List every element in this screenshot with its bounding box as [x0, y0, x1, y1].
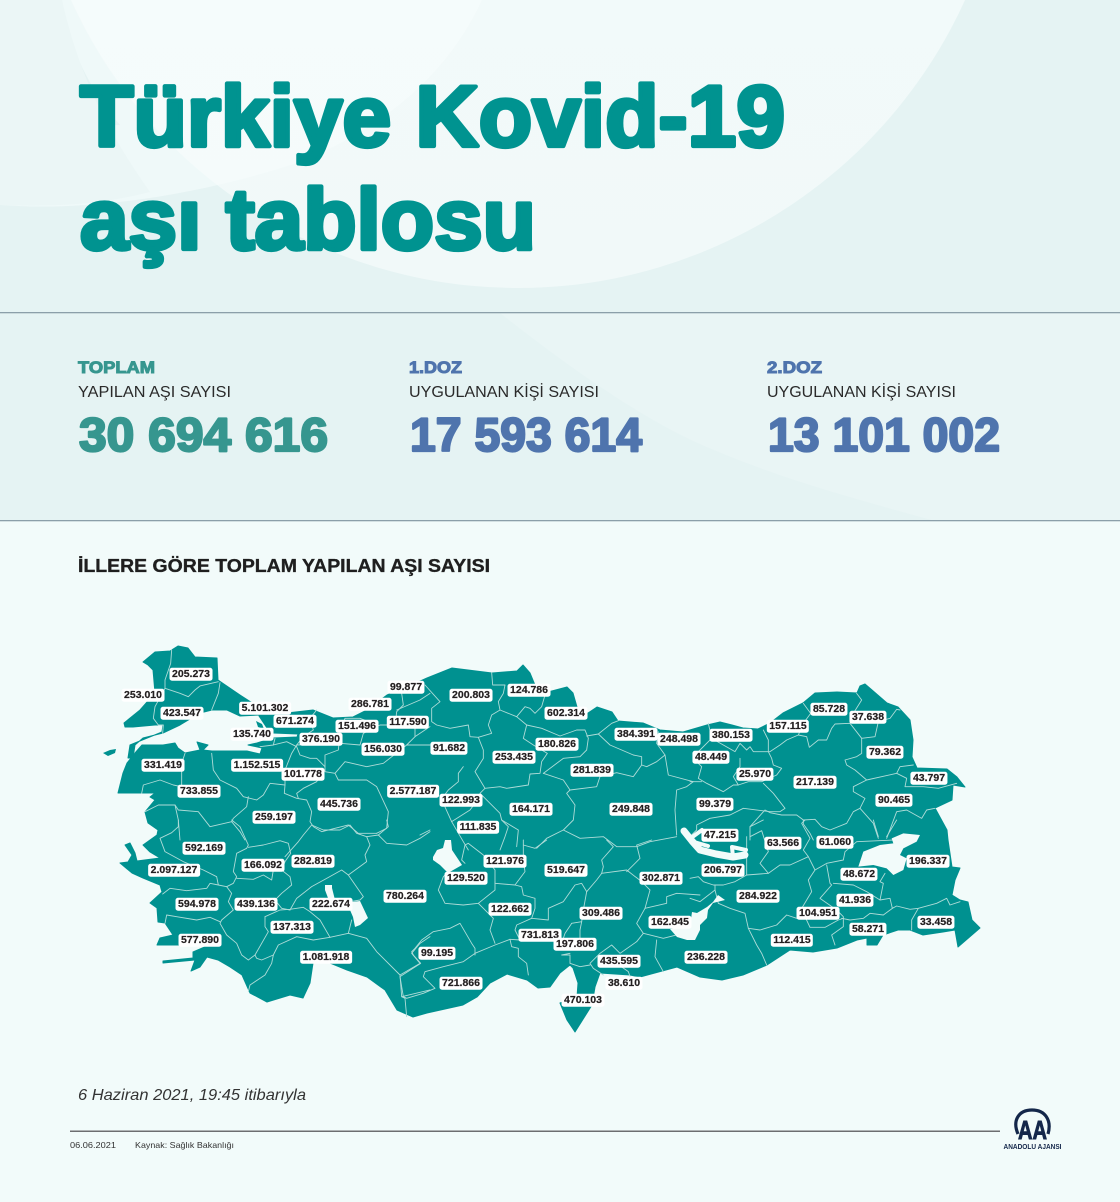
label: Sakarya: 376.190 [302, 733, 340, 745]
lake: Beyşehir [350, 901, 368, 927]
label: Bartın: 99.877 [390, 681, 422, 693]
footer rule [70, 1130, 1000, 1132]
lake: Atatürk dam [670, 895, 725, 940]
label: Aksaray: 129.520 [447, 872, 485, 884]
label: Gümüşhane: 48.449 [695, 751, 727, 763]
label: Düzce: 151.496 [338, 720, 376, 732]
label: Yalova: 135.740 [233, 728, 271, 740]
label: Isparta: 222.674 [312, 898, 350, 910]
land: Anatolia [118, 665, 980, 1032]
label: Siirt: 41.936 [839, 894, 871, 906]
label: Çankırı: 91.682 [433, 742, 465, 754]
label: Adana: 731.813 [521, 929, 559, 941]
logo: Anadolu Ajansı: ANADOLU AJANSI [1004, 1142, 1062, 1151]
footer source: Kaynak: Sağlık Bakanlığı [135, 1140, 234, 1150]
label: Balıkesir: 733.855 [180, 785, 218, 797]
province borders: south east [690, 820, 960, 965]
label: Artvin: 85.728 [813, 703, 845, 715]
label: İstanbul: 5.101.302 [242, 702, 288, 714]
label: Malatya: 302.871 [642, 872, 680, 884]
label: Kırklareli: 205.273 [172, 668, 210, 680]
label: Edirne: 253.010 [124, 689, 162, 701]
stat: 1. doz: UYGULANAN KİŞİ SAYISI [409, 382, 599, 401]
label: Manisa: 592.169 [185, 842, 223, 854]
label: Burdur: 137.313 [273, 921, 311, 933]
label: Erzurum: 217.139 [796, 776, 834, 788]
stat: 2. doz [767, 358, 1000, 461]
label: Ankara: 2.577.187 [390, 785, 436, 797]
panel: header background [0, 0, 1120, 520]
stat: toplam: 30 694 616 [79, 408, 328, 461]
province borders: northwest [142, 650, 430, 840]
label: İzmir: 2.097.127 [151, 864, 197, 876]
label: Antalya: 1.081.918 [303, 951, 349, 963]
lake: Van [858, 833, 920, 875]
stat: toplam: TOPLAM [78, 358, 155, 377]
label: Kocaeli: 671.274 [276, 715, 314, 727]
date note: 6 Haziran 2021, 19:45 itibarıyla [78, 1087, 306, 1104]
stat: 2. doz: 2.DOZ [767, 358, 822, 377]
divider line [0, 520, 1120, 521]
label: Bilecik: 101.778 [284, 768, 322, 780]
label: Amasya: 180.826 [538, 738, 576, 750]
divider line [0, 312, 1120, 313]
map: Turkey provinces [103, 646, 980, 1032]
label: Gaziantep: 435.595 [600, 955, 638, 967]
province borders: south centre [400, 840, 700, 998]
label: Samsun: 602.314 [547, 707, 585, 719]
title: aşı tablosu [80, 172, 536, 268]
label: Sivas: 249.848 [612, 803, 650, 815]
label: Kahramanmaraş: 309.486 [582, 907, 620, 919]
stat: 1. doz [409, 358, 642, 461]
label: Kırşehir: 111.835 [460, 821, 496, 833]
label: Kırıkkale: 122.993 [442, 794, 480, 806]
label: Eskişehir: 445.736 [320, 798, 358, 810]
label: Giresun: 248.498 [660, 733, 698, 745]
label: Bayburt: 25.970 [739, 768, 771, 780]
label: Ardahan: 37.638 [852, 711, 884, 723]
map heading: İLLERE GÖRE TOPLAM YAPILAN AŞI SAYISI [78, 556, 490, 576]
title [80, 69, 785, 268]
label: Rize: 157.115 [769, 720, 807, 732]
label: Adıyaman: 162.845 [651, 916, 689, 928]
stat: 1. doz: 1.DOZ [409, 358, 462, 377]
label: Niğde: 122.662 [491, 903, 529, 915]
island: Marmara [256, 721, 264, 729]
label: Denizli: 439.136 [237, 898, 275, 910]
label: Erzincan: 99.379 [699, 798, 731, 810]
label: Nevşehir: 121.976 [486, 855, 524, 867]
title: Türkiye Kovid-19 [80, 69, 785, 165]
label: Ağrı: 90.465 [878, 794, 910, 806]
label: Kayseri: 519.647 [547, 864, 585, 876]
label: Elazığ: 206.797 [704, 864, 742, 876]
label: Bitlis: 48.672 [843, 868, 875, 880]
label: Muğla: 577.890 [181, 934, 219, 946]
label: Kastamonu: 200.803 [452, 689, 490, 701]
lake: Eğirdir [325, 885, 335, 900]
stat: 1. doz: 17 593 614 [410, 408, 642, 461]
label: Bingöl: 63.566 [767, 837, 799, 849]
label: Çorum: 253.435 [495, 751, 533, 763]
label: Tunceli: 47.215 [704, 829, 736, 841]
lake: Tuz [433, 840, 462, 873]
label: Afyonkarahisar: 282.819 [294, 855, 332, 867]
footer date: 06.06.2021 [70, 1140, 116, 1150]
province borders: southwest [160, 820, 430, 1017]
label: Batman: 104.951 [799, 907, 837, 919]
label: Muş: 61.060 [819, 836, 851, 848]
label: Sinop: 124.786 [510, 684, 548, 696]
stat: 2. doz: 13 101 002 [768, 408, 1000, 461]
label: Iğdır: 43.797 [913, 772, 945, 784]
label: Şanlıurfa: 236.228 [687, 951, 725, 963]
stat: 2. doz: UYGULANAN KİŞİ SAYISI [767, 382, 956, 401]
label: Diyarbakır: 284.922 [739, 890, 777, 902]
label: Ordu: 384.391 [617, 728, 655, 740]
label: Tokat: 281.839 [573, 764, 611, 776]
label: Uşak: 166.092 [244, 859, 282, 871]
label: Van: 196.337 [909, 855, 947, 867]
label: Kütahya: 259.197 [255, 811, 293, 823]
label: Kars: 79.362 [869, 746, 901, 758]
logo: Anadolu Ajansı [1004, 1110, 1062, 1151]
stat: toplam: YAPILAN AŞI SAYISI [78, 384, 231, 401]
label: Karaman: 99.195 [421, 947, 453, 959]
land: Thrace [124, 646, 260, 758]
label: Tekirdağ: 423.547 [163, 707, 201, 719]
label: Yozgat: 164.171 [512, 803, 550, 815]
label: Şırnak: 58.271 [852, 923, 884, 935]
lake: Keban [684, 830, 746, 857]
label: Hatay: 470.103 [564, 994, 602, 1006]
label: Kilis: 38.610 [608, 977, 640, 989]
stat: toplam [78, 358, 328, 461]
province borders: north centre [420, 673, 693, 850]
label: Aydın: 594.978 [178, 898, 216, 910]
label: Trabzon: 380.153 [712, 729, 750, 741]
label: Karabük: 117.590 [389, 716, 427, 728]
label: Bursa: 1.152.515 [234, 759, 280, 771]
label: Konya: 780.264 [386, 890, 424, 902]
label: Bolu: 156.030 [364, 743, 402, 755]
island: Gökçeada [103, 749, 116, 756]
label: Hakkari: 33.458 [920, 916, 952, 928]
label: Zonguldak: 286.781 [351, 698, 389, 710]
logo: Anadolu Ajansı: AA [1018, 1115, 1047, 1145]
label: Mersin: 721.866 [442, 977, 480, 989]
label: Mardin: 112.415 [773, 934, 811, 946]
label: Çanakkale: 331.419 [144, 759, 182, 771]
province borders: north east [690, 693, 957, 840]
label: Osmaniye: 197.806 [556, 938, 594, 950]
